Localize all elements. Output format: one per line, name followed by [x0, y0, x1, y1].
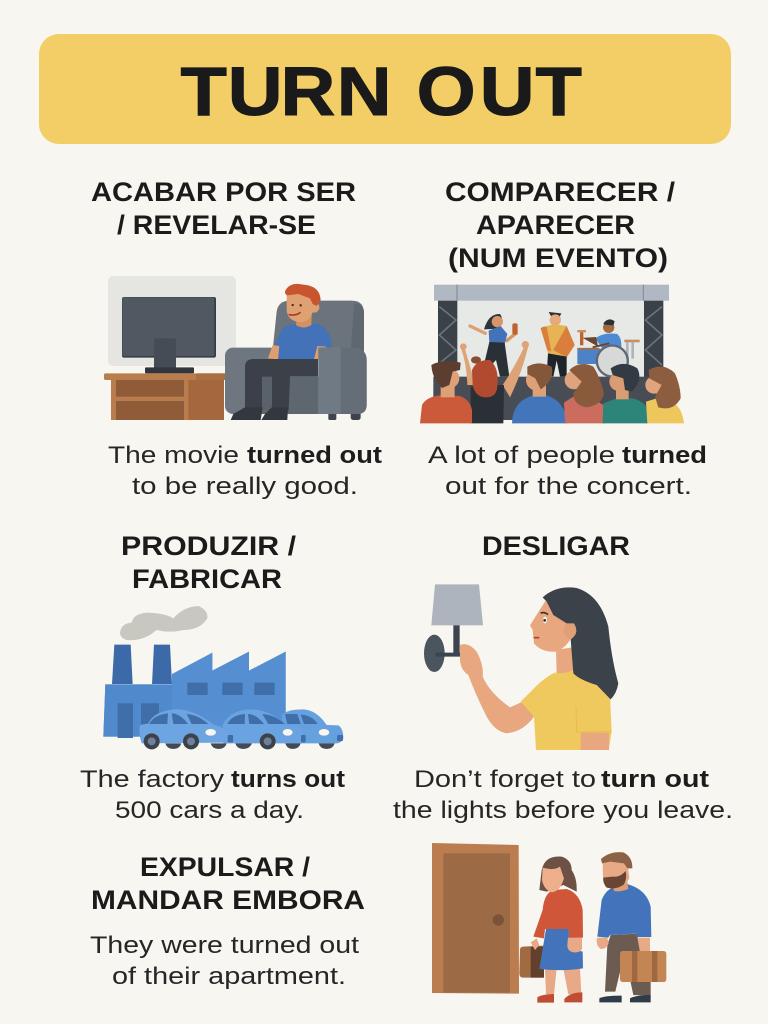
heading: produzir: FABRICAR: [132, 564, 282, 594]
example sentence: apartment: They were turned out: [90, 932, 359, 959]
example sentence: concert: A lot of people: [428, 442, 615, 469]
example sentence: movie: The movie: [108, 442, 239, 469]
heading: produzir: PRODUZIR /: [121, 531, 297, 561]
panel: comparecer: [420, 177, 707, 500]
illustration: concert with crowd: [420, 285, 684, 423]
example sentence: lights: Don’t forget to: [414, 766, 596, 793]
example sentence: factory: 500 cars a day.: [115, 797, 304, 824]
heading: acabar por ser: ACABAR POR SER: [91, 177, 356, 207]
example sentence: movie: [108, 442, 382, 500]
heading: expulsar: EXPULSAR /: [140, 852, 311, 882]
example sentence: factory: [80, 766, 345, 824]
example sentence: concert: out for the concert.: [445, 473, 692, 500]
heading: comparecer: [445, 177, 676, 273]
illustration: woman turning off wall lamp: [424, 584, 618, 750]
example sentence: factory: turns out: [231, 766, 345, 793]
example sentence: movie: turned out: [247, 442, 382, 469]
heading: expulsar: [91, 852, 365, 915]
illustration: factory and cars: [103, 606, 343, 749]
title: TURN OUT: [181, 53, 582, 130]
panel: acabar por ser: [91, 177, 382, 500]
example sentence: concert: turned: [622, 442, 707, 469]
heading: acabar por ser: [91, 177, 356, 240]
example sentence: movie: to be really good.: [132, 473, 358, 500]
example sentence: lights: turn out: [601, 766, 709, 793]
example sentence: apartment: [90, 932, 359, 990]
heading: comparecer: (NUM EVENTO): [448, 243, 668, 273]
illustration: couple with suitcases leaving through door: [432, 843, 666, 1003]
heading: acabar por ser: / REVELAR-SE: [117, 210, 316, 240]
example sentence: apartment: of their apartment.: [112, 963, 346, 990]
panel: expulsar: [90, 843, 666, 1003]
example sentence: lights: [393, 766, 733, 824]
heading: comparecer: APARECER: [476, 210, 635, 240]
panel: desligar: [393, 531, 733, 824]
example sentence: concert: [428, 442, 707, 500]
example sentence: factory: The factory: [80, 766, 225, 793]
panel: produzir: [80, 531, 345, 824]
example sentence: lights: the lights before you leave.: [393, 797, 733, 824]
heading: produzir: [121, 531, 297, 594]
heading: expulsar: MANDAR EMBORA: [91, 885, 365, 915]
illustration: man watching tv in armchair: [104, 276, 367, 420]
title banner: [39, 34, 731, 144]
heading: desligar: DESLIGAR: [482, 531, 630, 561]
heading: comparecer: COMPARECER /: [445, 177, 676, 207]
